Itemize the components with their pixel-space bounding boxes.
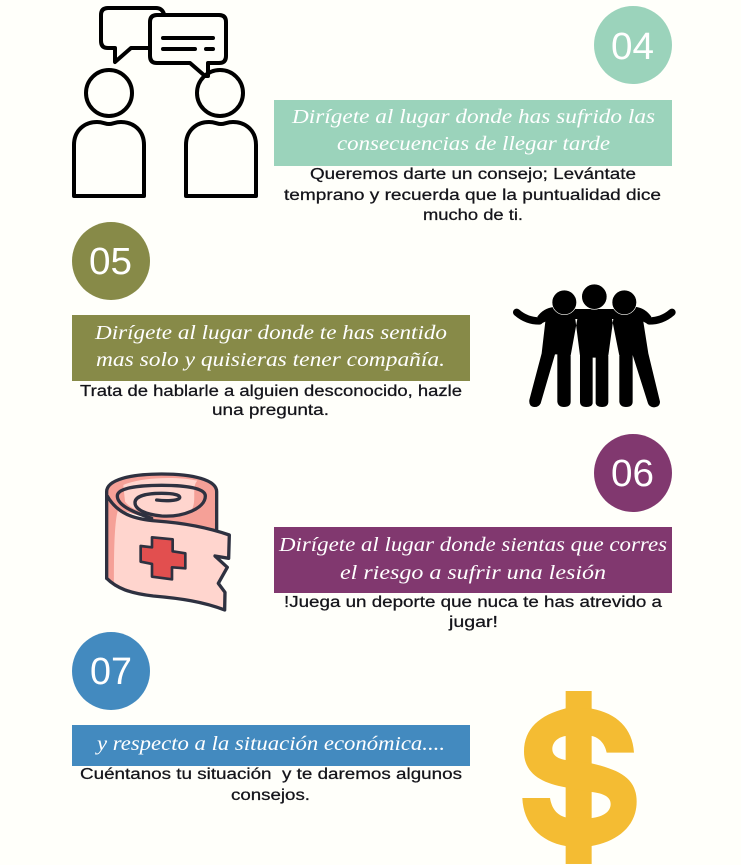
icon: dollar sign — [522, 691, 637, 864]
body text 04 — [284, 166, 661, 224]
body text 05 — [80, 383, 462, 419]
panel: step 04 — [274, 6, 672, 224]
banner 05 — [72, 315, 470, 381]
number badge 06: 06 — [611, 453, 654, 495]
banner 05: Dirígete al lugar donde te has sentido — [94, 322, 447, 344]
icon: bandage roll — [107, 474, 229, 610]
body text 06 — [284, 594, 662, 631]
number badge 05 — [72, 222, 150, 300]
number badge 04 — [594, 6, 672, 84]
body text 04: mucho de ti. — [423, 207, 523, 224]
body text 05: una pregunta. — [212, 402, 329, 419]
body text 06: !Juega un deporte que nuca te has atrevido a — [284, 594, 662, 611]
banner 04: consecuencias de llegar tarde — [337, 133, 610, 155]
number badge 04: 04 — [611, 26, 654, 68]
body text 07: consejos. — [231, 787, 310, 804]
banner 06: Dirígete al lugar donde sientas que corres — [278, 534, 667, 556]
banner 07 — [72, 725, 470, 766]
banner 06 — [274, 527, 672, 593]
panel: step 06 — [274, 434, 672, 631]
body text 06: jugar! — [448, 614, 498, 631]
body text 05: Trata de hablarle a alguien desconocido, hazle — [80, 383, 462, 400]
body text 07 — [80, 766, 462, 804]
number badge 07: 07 — [90, 651, 132, 693]
number badge 05: 05 — [89, 241, 132, 283]
number badge 06 — [594, 434, 672, 512]
panel: step 05 — [72, 222, 470, 419]
number badge 07 — [72, 632, 150, 710]
banner 05: mas solo y quisieras tener compañía. — [96, 349, 445, 371]
panel: step 07 — [72, 632, 470, 804]
body text 07: Cuéntanos tu situación y te daremos algunos — [80, 766, 462, 783]
icon: three friends embracing — [517, 284, 672, 407]
banner 06: el riesgo a sufrir una lesión — [340, 562, 606, 584]
icon: two people talking — [74, 8, 256, 196]
banner 04: Dirígete al lugar donde has sufrido las — [291, 106, 655, 128]
red cross — [141, 537, 185, 579]
banner 04 — [274, 100, 672, 166]
body text 04: Queremos darte un consejo; Levántate — [310, 166, 636, 183]
body text 04: temprano y recuerda que la puntualidad dice — [284, 187, 661, 204]
banner 07: y respecto a la situación económica.... — [95, 733, 445, 755]
